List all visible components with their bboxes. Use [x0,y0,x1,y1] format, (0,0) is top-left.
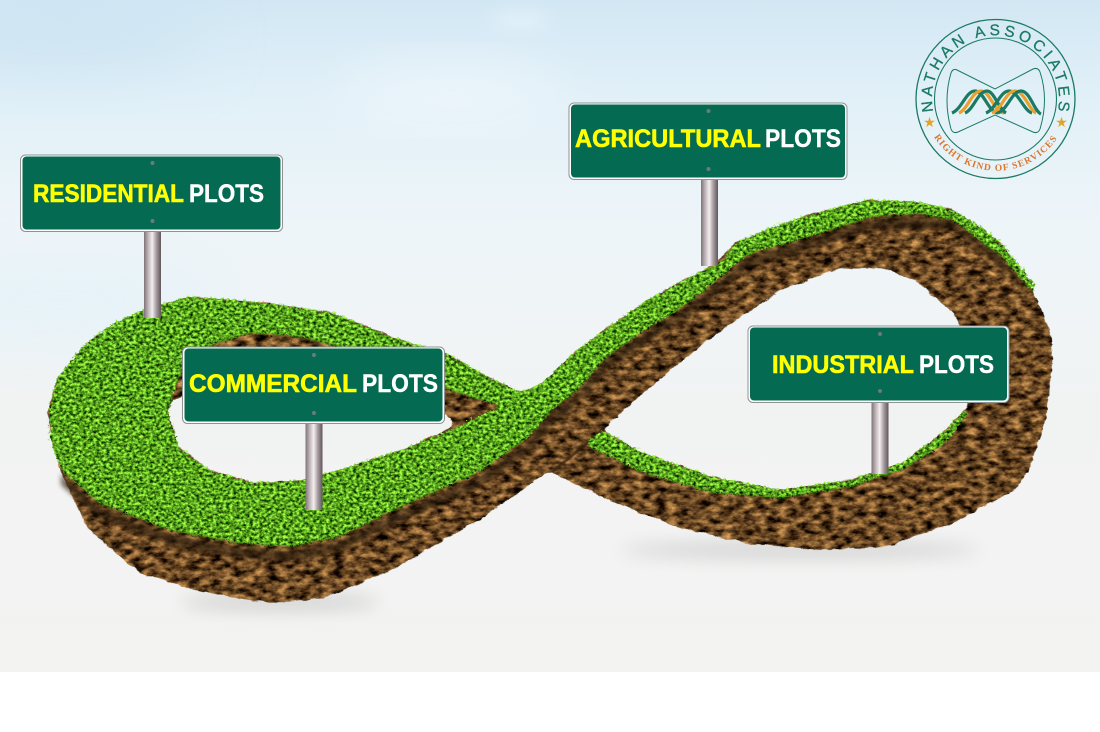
board [569,103,847,180]
grass ring and upper ribbon [50,200,1038,547]
screws [312,353,316,357]
label: AGRICULTURAL [575,125,761,153]
label: COMMERCIAL [189,370,357,398]
soil body [47,200,1053,603]
logo rings [916,20,1075,178]
board [748,326,1009,402]
pole [306,423,322,510]
logo monogram [952,91,1041,114]
pole [872,402,888,474]
logo name [932,35,1059,112]
sign: agricultural plots: PLOTS [765,125,841,153]
logo: nathan associates [915,18,1076,180]
pole [701,179,718,266]
sign: commercial plots [182,347,444,510]
sign: residential plots: PLOTS [189,180,264,208]
logo: nathan associates: ★ [1055,115,1068,131]
sign: commercial plots: PLOTS [362,370,438,398]
sign: industrial plots: PLOTS [919,351,994,379]
screws [150,161,154,165]
label: INDUSTRIAL [772,351,914,379]
infinity shape [47,200,1053,603]
soil fold at crossing [552,430,602,472]
sign: agricultural plots [569,103,847,266]
logo stars: ★ [923,115,936,131]
screws [706,109,710,113]
logo: nathan associates: NATHAN ASSOCIATES [921,24,1070,112]
screws [878,332,882,336]
label: RESIDENTIAL [33,180,184,208]
board [20,155,282,232]
logo bowtie outline [947,68,1044,133]
ground shadows [180,543,980,609]
grass shadow on soil [61,216,1029,562]
board [182,347,444,424]
sign: industrial plots [748,326,1009,474]
logo: nathan associates: RIGHT KIND OF SERVICES [934,133,1056,171]
sign: residential plots [20,155,282,318]
grass lower strip [585,407,969,498]
logo tagline [934,137,1058,171]
pole [144,231,161,318]
